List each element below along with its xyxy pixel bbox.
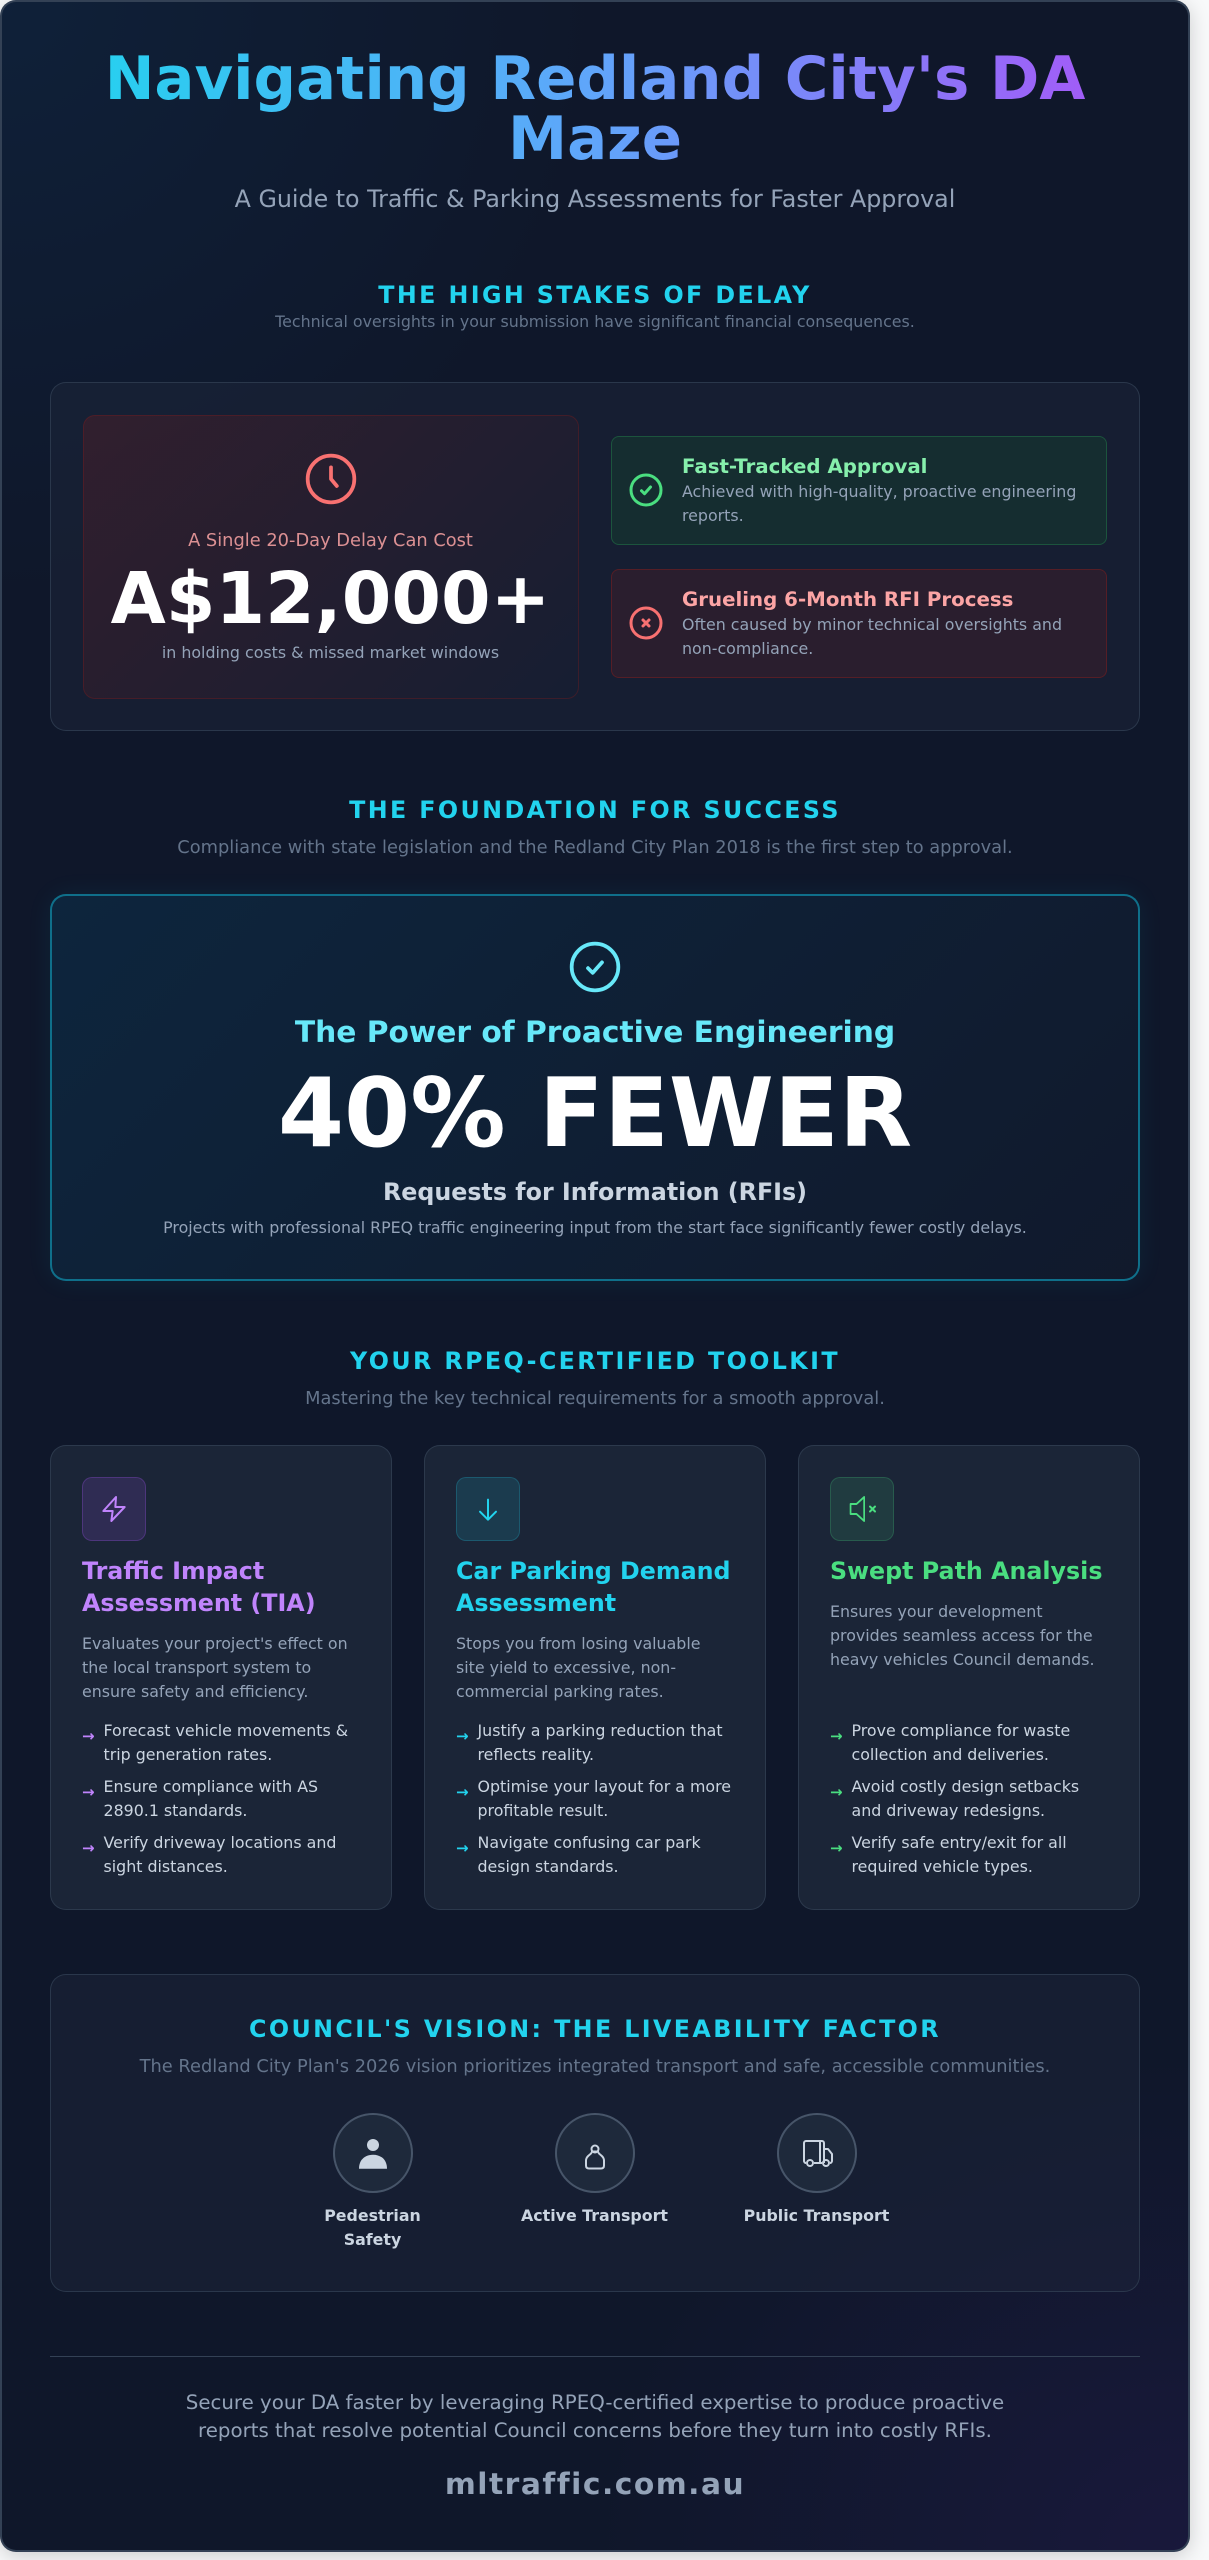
icon: pedestrian: [332, 2113, 412, 2193]
list item: →: [456, 1838, 469, 1856]
icon: clock: [306, 454, 356, 504]
callout text: Achieved with high-quality, proactive engineering: [682, 482, 1076, 501]
panel: proactive engineering: [50, 894, 1140, 1281]
panel: swept path analysis: [798, 1444, 1140, 1910]
label: delay cost: A Single 20-Day Delay Can Cost: [188, 530, 473, 551]
closing statement: Secure your DA faster by leveraging RPEQ-certified expertise to produce proactive: [186, 2390, 1004, 2414]
card text: [456, 1634, 700, 1700]
list item: collection and deliveries.: [852, 1744, 1049, 1764]
subtitle: A Guide to Traffic & Parking Assessments for Faster Approval: [235, 185, 955, 213]
card text: site yield to excessive, non-: [456, 1658, 676, 1676]
title: Maze: [508, 104, 682, 174]
section intro: foundation: Compliance with state legislation and the Redland City Plan 2018 is the first step to approval.: [177, 837, 1013, 858]
list item: trip generation rates.: [104, 1744, 272, 1764]
card text: Stops you from losing valuable: [456, 1634, 700, 1652]
icon: down arrow: [456, 1476, 520, 1540]
icon: x circle: [630, 606, 662, 640]
list item: design standards.: [478, 1856, 619, 1876]
list item: →: [830, 1726, 843, 1744]
card heading: Swept Path Analysis: [830, 1557, 1102, 1585]
list item: Verify driveway locations and: [104, 1832, 336, 1852]
list item: [82, 1832, 336, 1876]
callout heading: Fast-Tracked Approval: [682, 455, 927, 478]
list item: sight distances.: [104, 1856, 228, 1876]
callout: RFI process: [611, 569, 1107, 678]
icon: check circle: [630, 474, 662, 506]
list item: 2890.1 standards.: [104, 1800, 247, 1820]
list item: Optimise your layout for a more: [478, 1776, 731, 1796]
title: Navigating Redland City's DA: [105, 44, 1085, 114]
heading: toolkit: YOUR RPEQ-CERTIFIED TOOLKIT: [350, 1347, 840, 1375]
list item: →: [830, 1838, 843, 1856]
list item: [82, 1776, 318, 1820]
icon: muted speaker: [830, 1476, 894, 1540]
callout text: [682, 615, 1062, 658]
icon: public transport: [776, 2113, 856, 2193]
closing statement: [186, 2390, 1004, 2442]
list item: →: [456, 1726, 469, 1744]
card heading: Car Parking Demand: [456, 1557, 731, 1585]
list item: Forecast vehicle movements &: [104, 1720, 348, 1740]
card text: ensure safety and efficiency.: [82, 1682, 308, 1700]
heading: COUNCIL'S VISION: THE LIVEABILITY FACTOR: [249, 2015, 941, 2043]
figure: 40% fewer: 40% FEWER: [278, 1058, 912, 1168]
list item: →: [82, 1726, 95, 1744]
card heading: Traffic Impact: [82, 1557, 264, 1585]
list item: Prove compliance for waste: [852, 1720, 1070, 1740]
callout text: Often caused by minor technical oversights and: [682, 615, 1062, 634]
panel: cost of delay: [82, 415, 578, 699]
list item: and driveway redesigns.: [852, 1800, 1045, 1820]
card text: [830, 1602, 1094, 1668]
list item: →: [82, 1782, 95, 1800]
closing statement: reports that resolve potential Council concerns before they turn into costly RFIs.: [198, 2419, 992, 2442]
panel: car parking demand assessment: [424, 1444, 766, 1910]
list item: [830, 1720, 1070, 1764]
icon: lightning bolt: [82, 1476, 146, 1540]
caption: Projects with professional RPEQ traffic engineering input from the start face significantly fewer costly delays.: [163, 1218, 1027, 1236]
callout text: reports.: [682, 506, 744, 525]
callout text: [682, 482, 1076, 525]
list item: required vehicle types.: [852, 1856, 1033, 1876]
section intro: toolkit: Mastering the key technical requirements for a smooth approval.: [305, 1388, 885, 1409]
label: active transport: Active Transport: [521, 2206, 668, 2225]
figure: cost: A$12,000+: [111, 556, 550, 640]
list item: →: [456, 1782, 469, 1800]
list item: [82, 1720, 348, 1764]
list item: [456, 1776, 731, 1820]
panel: traffic impact assessment: [50, 1444, 392, 1910]
list item: [830, 1776, 1079, 1820]
heading: The Power of Proactive Engineering: [295, 1014, 895, 1050]
list item: reflects reality.: [478, 1744, 594, 1764]
card text: provides seamless access for the: [830, 1626, 1093, 1644]
callout text: non-compliance.: [682, 639, 813, 658]
card text: the local transport system to: [82, 1658, 311, 1676]
panel: high stakes: [50, 382, 1140, 731]
label: pedestrian: [324, 2206, 421, 2249]
list item: →: [830, 1782, 843, 1800]
list item: [830, 1832, 1067, 1876]
icon: check circle: [570, 942, 620, 992]
label: pedestrian: Pedestrian: [324, 2206, 421, 2225]
callout heading: Grueling 6-Month RFI Process: [682, 588, 1013, 611]
label: pedestrian: Safety: [344, 2230, 401, 2249]
card heading: [456, 1557, 731, 1617]
section intro: high stakes: Technical oversights in your submission have significant financial consequences.: [275, 312, 915, 331]
list item: Avoid costly design setbacks: [852, 1776, 1079, 1796]
section intro: The Redland City Plan's 2026 vision prioritizes integrated transport and safe, accessible communities.: [140, 2056, 1050, 2077]
list item: Verify safe entry/exit for all: [852, 1832, 1067, 1852]
card text: heavy vehicles Council demands.: [830, 1650, 1094, 1668]
card heading: Assessment (TIA): [82, 1589, 316, 1617]
card text: Ensures your development: [830, 1602, 1043, 1620]
list item: Justify a parking reduction that: [478, 1720, 723, 1740]
card text: [82, 1634, 348, 1700]
card text: Evaluates your project's effect on: [82, 1634, 348, 1652]
card heading: Assessment: [456, 1589, 616, 1617]
heading: high stakes of delay: THE HIGH STAKES OF DELAY: [378, 280, 812, 308]
website: mltraffic.com.au: [445, 2467, 745, 2502]
panel: council vision: [50, 1974, 1140, 2292]
list item: →: [82, 1838, 95, 1856]
list item: Ensure compliance with AS: [104, 1776, 318, 1796]
card text: commercial parking rates.: [456, 1682, 664, 1700]
heading: foundation: THE FOUNDATION FOR SUCCESS: [349, 796, 841, 824]
callout: fast-tracked approval: [611, 436, 1107, 545]
card heading: [82, 1557, 316, 1617]
list item: [456, 1832, 701, 1876]
list item: Navigate confusing car park: [478, 1832, 701, 1852]
icon: active transport: [554, 2113, 634, 2193]
label: RFIs: Requests for Information (RFIs): [383, 1178, 807, 1206]
caption: cost: in holding costs & missed market windows: [162, 643, 499, 662]
title: [50, 50, 1140, 170]
list item: profitable result.: [478, 1800, 608, 1820]
list item: [456, 1720, 723, 1764]
label: public transport: Public Transport: [744, 2206, 889, 2225]
